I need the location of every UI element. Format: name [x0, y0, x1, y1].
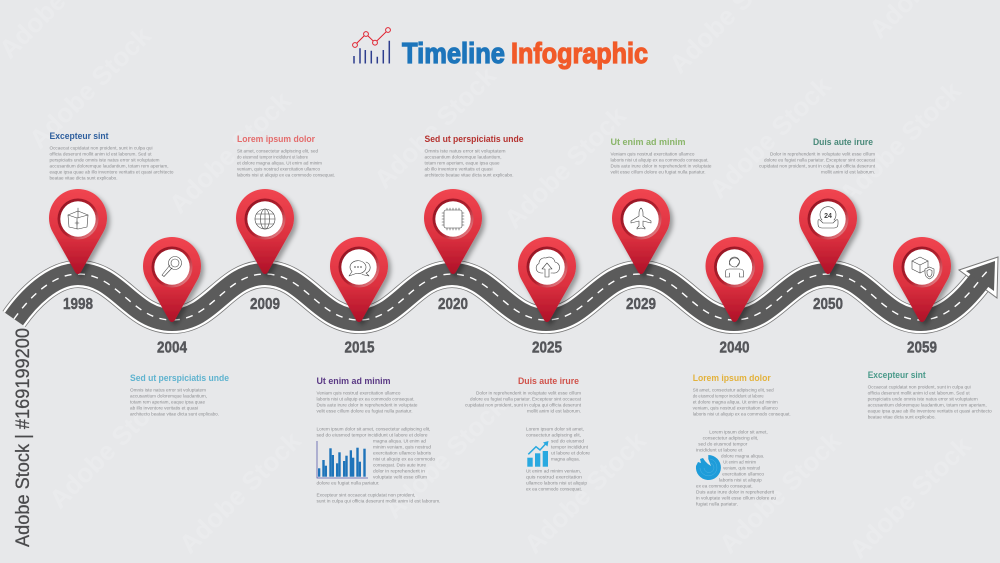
text: excepteur sint (bottom) — [868, 369, 992, 420]
watermarks: Adobe Stock — [843, 430, 977, 563]
text block with bar chart: voluptate velit esse cillum — [373, 474, 427, 480]
text: duis aute irure (bottom): Duis aute irure — [518, 375, 579, 386]
text: lorem ipsum dolor (bottom): et dolore magna aliqua. Ut enim ad minim — [693, 400, 778, 404]
years: 2009 — [250, 296, 280, 313]
icon: chart logo — [353, 28, 390, 64]
text block with pie icon: ex ea commodo consequat. — [696, 484, 753, 488]
watermarks: Adobe Stock — [498, 100, 632, 234]
text: ut enim ad minim (top): Veniam quis nostrud exercitation ullamco — [610, 152, 695, 156]
text: excepteur sint (bottom): Excepteur sint — [868, 369, 926, 380]
text: duis aute irure (bottom): cupidatat non proident, sunt in culpa qui officia deserunt — [465, 402, 582, 408]
text: ut enim ad minim (bottom): Duis aute irure dolor in reprehenderit in voluptate — [316, 402, 418, 408]
text: sed ut perspiciatis unde (top): architecto beatae vitae dicta sunt explicabo. — [424, 172, 514, 178]
text: excepteur sint (top): perspiciatis unde omnis iste natus error sit voluptatem — [50, 158, 160, 162]
text: sed ut perspiciatis unde (top) — [424, 133, 524, 178]
text: duis aute irure (bottom): Dolor in reprehenderit in voluptate velit esse cillum — [476, 390, 581, 396]
text block with bar chart: consequat. Duis aute irure — [373, 462, 426, 468]
text: lorem ipsum dolor (bottom): do eiusmod tempor incididunt ut labore — [693, 394, 764, 398]
text: sed ut perspiciatis unde (bottom): Sed ut perspiciatis unde — [130, 372, 229, 383]
text: lorem ipsum dolor (top): veniam, quis nostrud exercitation ullamco — [237, 166, 320, 172]
watermarks: Adobe Stock — [43, 380, 177, 514]
years: 2050 — [813, 296, 843, 313]
watermarks: Adobe Stock — [833, 75, 967, 209]
road with arrow — [14, 257, 998, 320]
text: lorem ipsum dolor (bottom): veniam, quis nostrud exercitation ullamco — [693, 406, 778, 410]
years: 2015 — [344, 340, 375, 356]
text block with pie icon: Duis aute irure dolor in reprehenderit — [696, 490, 775, 494]
pin: magnifier — [143, 237, 201, 322]
text block with pie icon: Lorem ipsum dolor sit amet, — [709, 430, 768, 434]
icon: growth bars — [527, 441, 548, 467]
text block with pie icon: fugiat nulla pariatur. — [696, 502, 738, 506]
pin: globe — [236, 189, 294, 274]
years: 1998 — [63, 296, 93, 313]
watermarks: Adobe Stock — [378, 390, 512, 524]
text block with bar chart: sunt in culpa qui officia deserunt mollit anim id est laborum. — [316, 498, 440, 504]
text: excepteur sint (top): Excepteur sint — [50, 130, 108, 141]
years: 2025 — [532, 340, 562, 356]
text: lorem ipsum dolor (top): Lorem ipsum dolor — [237, 133, 315, 144]
watermarks: Adobe Stock — [23, 20, 157, 154]
text: excepteur sint (top): beatae vitae dicta sunt explicabo. — [50, 176, 118, 180]
text: sed ut perspiciatis unde (top): Omnis iste natus error sit voluptatem — [424, 148, 506, 154]
text: excepteur sint (bottom): officia deserunt mollit anim id est laborum. Sed ut — [868, 390, 970, 396]
text: ut enim ad minim (top): laboris nisi ut aliquip ex ea commodo consequat. — [610, 158, 708, 162]
text block with growth icon: ullamco laboris nisi ut aliquip — [526, 480, 587, 486]
text: ut enim ad minim (bottom): Ut enim ad minim — [316, 375, 390, 386]
text block with growth icon: magna aliqua. — [551, 456, 580, 462]
text block with bar chart: sed do eiusmod tempor incididunt ut labore et dolore — [316, 432, 428, 438]
text block with bar chart — [316, 426, 440, 504]
years: 2020 — [438, 296, 468, 313]
text: sed ut perspiciatis unde (bottom) — [130, 372, 229, 416]
text: excepteur sint (top): officia deserunt mollit anim id est laborum. Sed ut — [50, 152, 152, 156]
text: duis aute irure (top): dolore eu fugiat nulla pariatur. Excepteur sint occaecat — [764, 158, 876, 162]
watermarks: Adobe Stock — [713, 425, 847, 559]
pin: box — [49, 189, 107, 274]
text: sed ut perspiciatis unde (bottom): architecto beatae vitae dicta sunt explicabo. — [130, 412, 219, 416]
text: duis aute irure (bottom): dolore eu fugiat nulla pariatur. Excepteur sint occaecat — [470, 396, 582, 402]
text: excepteur sint (bottom): accusantium doloremque laudantium, totam rem aperiam, — [868, 402, 987, 408]
text: sed ut perspiciatis unde (bottom): accusantium doloremque laudantium, — [130, 394, 207, 398]
pin: 24 hour support — [799, 189, 857, 274]
years: 2029 — [626, 296, 656, 313]
watermarks: Adobe Stock — [518, 425, 652, 559]
text block with bar chart: dolor in reprehenderit in — [373, 468, 425, 474]
text block with growth icon: Lorem ipsum dolor sit amet, — [526, 426, 584, 432]
text block with pie icon: Ut enim ad minim — [723, 460, 756, 464]
text: duis aute irure (top) — [759, 136, 876, 174]
pin: 24 hour support: 24 — [824, 213, 832, 220]
text block with bar chart: nisi ut aliquip ex ea commodo — [373, 456, 435, 462]
text: ut enim ad minim (top): velit esse cillum dolore eu fugiat nulla pariatur. — [610, 170, 706, 174]
years: 2059 — [907, 340, 937, 356]
pin: chip — [424, 189, 482, 274]
text block with pie icon: incididunt ut labore et — [696, 448, 743, 452]
text: ut enim ad minim (top): Duis aute irure dolor in reprehenderit in voluptate — [610, 164, 712, 168]
text: lorem ipsum dolor (top): do eiusmod tempor incididunt ut labore — [237, 154, 308, 160]
text: lorem ipsum dolor (top): et dolore magna aliqua. Ut enim ad minim — [237, 160, 322, 166]
text: duis aute irure (top): Duis aute irure — [813, 136, 873, 147]
text block with pie icon: consectetur adipiscing elit, — [703, 436, 758, 440]
text: excepteur sint (bottom): eaque ipsa quae ab illo inventore veritatis et quasi architecto — [868, 408, 992, 414]
text: lorem ipsum dolor (bottom): Lorem ipsum dolor — [693, 372, 771, 383]
text: lorem ipsum dolor (bottom): Sit amet, consectetur adipiscing elit, sed — [693, 388, 774, 392]
text block with bar chart: magna aliqua. Ut enim ad — [373, 438, 426, 444]
pin: box with shield — [893, 237, 951, 322]
text block with growth icon: Ut enim ad minim veniam, — [526, 468, 581, 474]
text: sed ut perspiciatis unde (top): totam rem aperiam, eaque ipsa quae — [424, 160, 500, 166]
text block with growth icon: tempor incididunt — [551, 444, 589, 450]
text: sed ut perspiciatis unde (bottom): Omnis iste natus error sit voluptatem — [130, 388, 206, 392]
text: excepteur sint (bottom): perspiciatis unde omnis iste natus error sit voluptatem — [868, 396, 978, 402]
text block with bar chart: minim veniam, quis nostrud — [373, 444, 431, 450]
pin: chat bubbles — [330, 237, 388, 322]
text: duis aute irure (top): cupidatat non proident, sunt in culpa qui officia deserunt — [759, 164, 876, 168]
icon: radial pie — [696, 455, 721, 480]
text: duis aute irure (bottom) — [465, 375, 582, 414]
pin: cloud upload — [518, 237, 576, 322]
heading: timeline: Timeline — [402, 38, 505, 70]
text block with pie icon: in voluptate velit esse cillum dolore eu — [696, 496, 776, 500]
text: excepteur sint (top): Occaecat cupidatat non proident, sunt in culpa qui — [50, 146, 152, 150]
text block with bar chart: exercitation ullamco laboris — [373, 450, 432, 456]
bar chart — [317, 441, 368, 478]
text: ut enim ad minim (top): Ut enim ad minim — [610, 136, 686, 147]
text: duis aute irure (top): mollit anim id est laborum. — [821, 170, 875, 174]
text: lorem ipsum dolor (top) — [237, 133, 335, 178]
text: ut enim ad minim (bottom): Veniam quis nostrud exercitation ullamco — [316, 390, 401, 396]
text block with pie icon: veniam, quis nostrud — [723, 466, 760, 470]
text block with pie icon: dolore magna aliqua. — [721, 454, 764, 458]
watermarks: Adobe Stock — [368, 60, 502, 194]
text: lorem ipsum dolor (bottom) — [693, 372, 791, 416]
text: sed ut perspiciatis unde (top): accusantium doloremque laudantium, — [424, 154, 502, 160]
years: 2040 — [720, 340, 750, 356]
text block with pie icon: sed do eiusmod tempor — [698, 442, 748, 446]
title with logo — [353, 28, 648, 70]
pin: airplane — [612, 189, 670, 274]
text: sed ut perspiciatis unde (top): ab illo inventore veritatis et quasi — [424, 166, 492, 172]
text: ut enim ad minim (bottom): laboris nisi ut aliquip ex ea commodo consequat. — [316, 396, 414, 402]
stock id side label: Adobe Stock | #169199200 — [13, 328, 34, 547]
text block with growth icon: quis nostrud exercitation — [526, 474, 582, 480]
pin: person with headset — [706, 237, 764, 322]
text block with growth icon: consectetur adipiscing elit, — [526, 432, 581, 438]
heading: infographic: Infographic — [511, 38, 648, 70]
text: excepteur sint (bottom): Occaecat cupidatat non proident, sunt in culpa qui — [868, 384, 971, 390]
text: excepteur sint (top): eaque ipsa quae ab illo inventore veritatis et quasi architecto — [50, 170, 174, 174]
text: excepteur sint (top) — [50, 130, 174, 180]
text block with pie icon — [696, 430, 776, 506]
text block with pie icon: laboris nisi ut aliquip — [719, 478, 762, 482]
text: lorem ipsum dolor (top): laboris nisi ut aliquip ex ea commodo consequat. — [237, 172, 335, 178]
text block with growth icon: ut labore et dolore — [551, 450, 590, 456]
text block with pie icon: exercitation ullamco — [722, 472, 764, 476]
text block with bar chart: Excepteur sint occaecat cupidatat non proident, — [316, 492, 416, 498]
text block with bar chart: Lorem ipsum dolor sit amet, consectetur adipiscing elit, — [316, 426, 430, 432]
watermarks: Adobe Stock — [173, 425, 307, 559]
years — [63, 296, 937, 356]
text: duis aute irure (bottom): mollit anim id est laborum. — [527, 408, 581, 414]
text block with growth icon: sed do eiusmod — [551, 438, 584, 444]
text block with growth icon — [526, 426, 590, 492]
text: excepteur sint (bottom): beatae vitae dicta sunt explicabo. — [868, 414, 936, 420]
text: sed ut perspiciatis unde (bottom): ab illo inventore veritatis et quasi — [130, 406, 198, 410]
text: ut enim ad minim (top) — [610, 136, 712, 174]
watermarks: Adobe Stock — [163, 85, 297, 219]
text: sed ut perspiciatis unde (top): Sed ut perspiciatis unde — [424, 133, 524, 144]
years: 2004 — [157, 340, 187, 356]
text: sed ut perspiciatis unde (bottom): totam rem aperiam, eaque ipsa quae — [130, 400, 205, 404]
text: lorem ipsum dolor (bottom): laboris nisi ut aliquip ex ea commodo consequat. — [693, 412, 791, 416]
text: duis aute irure (top): Dolor in reprehenderit in voluptate velit esse cillum — [770, 152, 875, 156]
text: ut enim ad minim (bottom): velit esse cillum dolore eu fugiat nulla pariatur. — [316, 408, 412, 414]
text block with growth icon: ex ea commodo consequat. — [526, 486, 582, 492]
watermarks: Adobe Stock — [703, 70, 837, 204]
text: lorem ipsum dolor (top): Sit amet, consectetur adipiscing elit, sed — [237, 148, 318, 154]
text: excepteur sint (top): accusantium doloremque laudantium, totam rem aperiam, — [50, 164, 168, 168]
text: ut enim ad minim (bottom) — [316, 375, 418, 414]
text block with bar chart: dolore eu fugiat nulla pariatur. — [316, 480, 380, 486]
